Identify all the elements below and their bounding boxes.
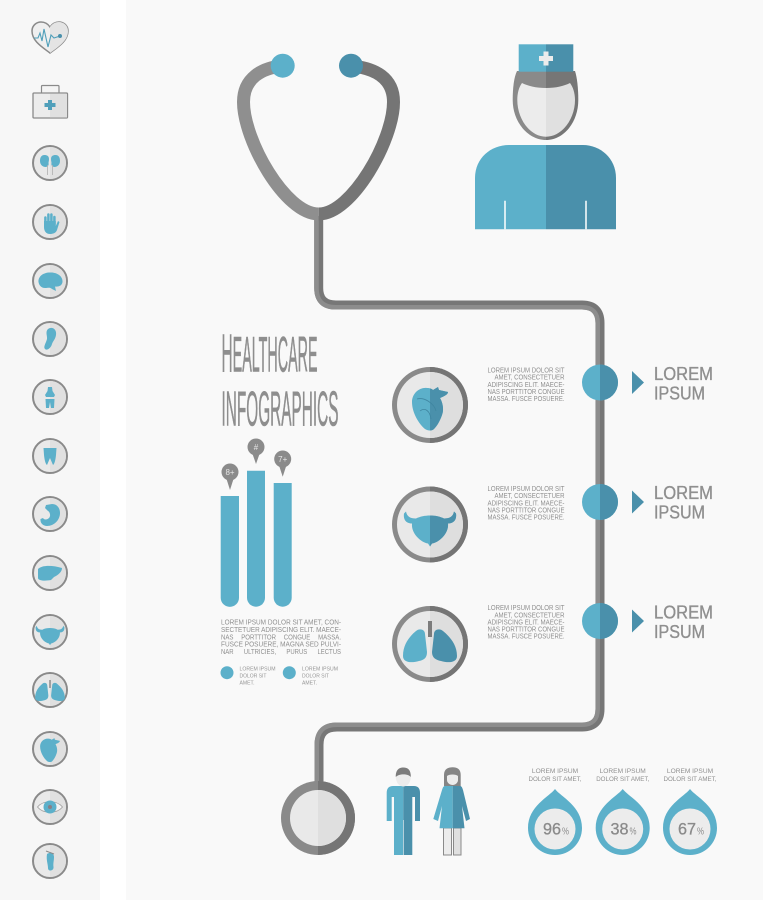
drop stat: 96%: 96	[543, 820, 561, 838]
callout 1	[582, 364, 713, 404]
legend item 2: DOLOR SIT	[302, 674, 330, 680]
chart description text: FUSCE POSUERE, MAGNA SED PULVI-	[221, 642, 342, 648]
panel: sidebar icons	[32, 22, 68, 878]
body	[475, 145, 546, 229]
chart description text: NAS PORTTITOR CONGUE MASSA.	[221, 634, 341, 642]
text block 1: LOREM IPSUM DOLOR SIT	[488, 368, 565, 374]
chart description text	[221, 620, 342, 656]
drop stat: 67%: DOLOR SIT AMET,	[664, 776, 717, 783]
text block 1: NAS PORTTITOR CONGUE	[488, 389, 565, 396]
text block 2: NAS PORTTITOR CONGUE	[488, 507, 565, 514]
legend item 2: AMET.	[302, 681, 317, 687]
icon: woman	[433, 767, 470, 855]
drop stat: 67%: %	[697, 826, 704, 838]
callout 1: LOREM	[654, 364, 713, 384]
callout 2: LOREM	[654, 483, 713, 503]
text block 3: NAS PORTTITOR CONGUE	[488, 627, 565, 634]
nurse cap	[519, 44, 546, 72]
icon: brain	[33, 264, 67, 298]
chart description text: SECTETUER ADIPISCING ELIT. MAECE-	[221, 627, 342, 634]
icon: liver	[33, 556, 67, 590]
icon: stomach	[33, 497, 67, 531]
callout 3: LOREM	[654, 602, 713, 622]
drop stat: 96%: LOREM IPSUM	[532, 768, 578, 775]
drop stat: 96%	[528, 768, 582, 855]
text: HEALTHCARE	[222, 324, 318, 384]
callout 1: IPSUM	[654, 384, 705, 404]
bar 1: 8+	[225, 468, 235, 477]
nurse figure	[475, 44, 616, 229]
icon: heart with pulse	[32, 22, 68, 53]
icon: first aid kit	[33, 86, 68, 118]
chart description text: LOREM IPSUM DOLOR SIT AMET, CON-	[221, 620, 342, 626]
stethoscope headset	[244, 54, 394, 214]
text block 1: AMET, CONSECTETUER	[494, 375, 564, 382]
bar 3	[274, 450, 292, 607]
bar chart	[221, 438, 292, 607]
text block 1: MASSA. FUSCE POSUERE.	[488, 396, 565, 403]
drop stat: 38%: DOLOR SIT AMET,	[596, 776, 649, 783]
text block 3: ADIPISCING ELIT. MAECE-	[488, 620, 565, 627]
legend item 2	[283, 666, 338, 687]
stethoscope tube	[316, 216, 600, 785]
icon: kidneys	[33, 146, 67, 180]
text block 3: LOREM IPSUM DOLOR SIT	[488, 605, 565, 612]
bar 1	[221, 464, 239, 607]
text block 2: LOREM IPSUM DOLOR SIT	[488, 486, 565, 493]
drop stat: 38%: %	[630, 826, 637, 838]
title	[222, 324, 338, 436]
text block 2: AMET, CONSECTETUER	[494, 493, 564, 500]
icon: lungs	[33, 673, 67, 707]
head and hair	[513, 71, 546, 140]
icon: bladder	[33, 615, 67, 649]
icon: tooth	[33, 439, 67, 473]
stethoscope chest piece	[281, 781, 355, 855]
icon: knee joint	[33, 380, 67, 414]
text block 2	[488, 486, 565, 522]
legend item 1	[220, 666, 276, 687]
callout 3: IPSUM	[654, 622, 705, 642]
chart description text: NAR ULTRICIES, PURUS LECTUS	[221, 649, 341, 656]
icon: large bladder	[392, 486, 468, 562]
text: INFOGRAPHICS	[222, 382, 338, 436]
icon: foot	[33, 844, 67, 878]
icon: large heart	[392, 367, 468, 443]
icon: hand	[33, 205, 67, 239]
icon: right earpiece	[339, 54, 363, 78]
icon: man	[387, 768, 420, 855]
text block 3: AMET, CONSECTETUER	[494, 612, 564, 619]
text block 3	[488, 605, 565, 641]
drop stat: 67%: LOREM IPSUM	[667, 768, 713, 775]
icon: left earpiece	[271, 54, 295, 78]
drop stat: 38%: LOREM IPSUM	[600, 768, 646, 775]
legend item 1: LOREM IPSUM	[240, 667, 276, 673]
icon: cross on cap	[539, 52, 553, 66]
bar 2: #	[254, 443, 259, 452]
drop stat: 96%: %	[562, 826, 569, 838]
text block 2: MASSA. FUSCE POSUERE.	[488, 514, 565, 522]
text block 3: MASSA. FUSCE POSUERE.	[488, 634, 565, 641]
bar 2	[247, 438, 265, 607]
icon: large lungs	[392, 606, 468, 682]
callout 2	[582, 483, 713, 522]
callout 3	[582, 602, 713, 642]
legend item 1: AMET.	[240, 681, 255, 687]
drop stat: 96%: DOLOR SIT AMET,	[528, 776, 582, 783]
legend item 1: DOLOR SIT	[240, 674, 267, 680]
text block 1	[488, 368, 565, 403]
text block 1: ADIPISCING ELIT. MAECE-	[488, 382, 565, 389]
callout 2: IPSUM	[654, 502, 705, 522]
icon: eye	[33, 790, 67, 824]
legend item 2: LOREM IPSUM	[302, 667, 338, 673]
bar 3: 7+	[278, 455, 288, 464]
icon: ear	[33, 322, 67, 356]
drop stat: 67%	[663, 768, 717, 855]
drop stat: 38%	[596, 768, 650, 855]
drop stat: 38%: 38	[610, 820, 628, 838]
drop stat: 67%: 67	[678, 820, 696, 838]
legend	[220, 666, 338, 687]
icon: heart organ	[33, 732, 67, 766]
text block 2: ADIPISCING ELIT. MAECE-	[488, 500, 565, 507]
